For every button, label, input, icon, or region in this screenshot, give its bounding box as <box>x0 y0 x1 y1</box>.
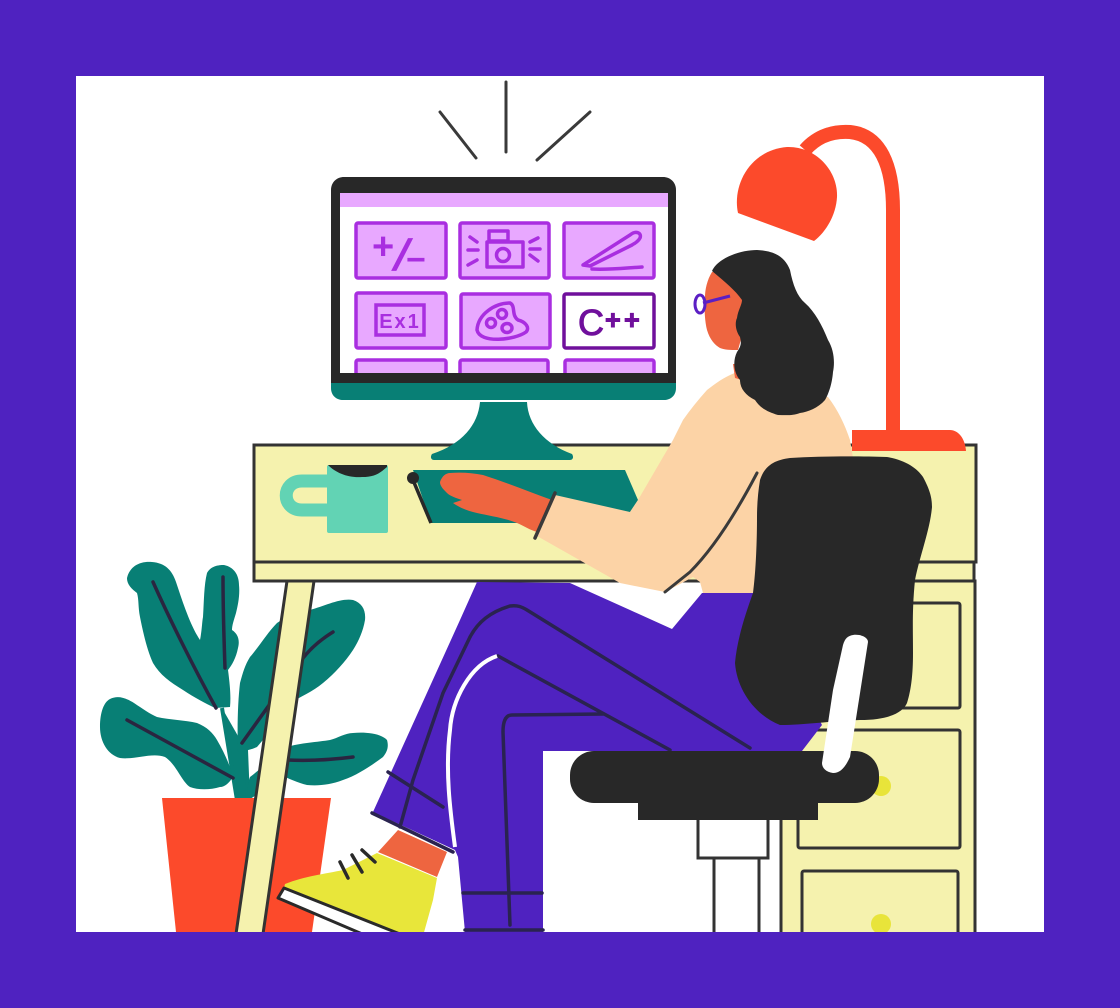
trouser highlight <box>448 656 497 847</box>
monitor stand <box>431 402 573 460</box>
monitor chin <box>331 383 676 400</box>
desk front edge <box>254 562 974 581</box>
light rays <box>440 82 590 160</box>
drawer knobs <box>871 776 891 934</box>
sweater seam <box>665 473 757 592</box>
drawer unit <box>781 581 975 941</box>
app tile: C++: C <box>578 302 604 343</box>
chair post <box>698 818 768 938</box>
chair armrest <box>822 635 868 773</box>
icon: potted plant <box>100 562 388 932</box>
tablet pen knob <box>407 472 419 484</box>
sweater <box>537 372 860 593</box>
drawer three <box>802 871 958 941</box>
mug body <box>327 465 388 533</box>
desktop computer <box>331 82 676 460</box>
face <box>705 272 752 350</box>
app tile: plus minus: − <box>406 241 426 279</box>
hair <box>712 250 834 415</box>
app tile: spreadsheet: Ex1 <box>379 311 421 333</box>
app tile: pencil <box>564 223 654 278</box>
scene <box>100 82 976 941</box>
partial tiles row <box>354 358 656 373</box>
lamp shade <box>737 147 837 241</box>
app tile: C++: + <box>605 305 621 335</box>
plant stems <box>222 708 248 800</box>
chair seat base <box>638 790 818 820</box>
mug handle <box>286 481 327 510</box>
app tile: plus minus: / <box>388 230 417 280</box>
plant pot <box>162 798 331 932</box>
head <box>695 250 834 415</box>
app tile: camera <box>460 223 549 278</box>
lamp base <box>852 430 966 451</box>
tablet edge <box>413 480 431 523</box>
monitor bezel <box>331 177 676 383</box>
sleeve cuff <box>535 493 555 538</box>
white canvas panel <box>76 76 1044 932</box>
neck <box>733 364 742 380</box>
trouser seams <box>372 606 750 930</box>
icon: desk lamp <box>737 132 966 451</box>
icon: mug <box>286 465 388 533</box>
drawer two <box>798 730 960 848</box>
app tile: palette <box>461 294 550 348</box>
person <box>278 250 932 938</box>
hand <box>440 473 552 532</box>
screen title bar <box>340 193 668 207</box>
graphics tablet <box>407 470 638 523</box>
lamp arm <box>805 132 893 436</box>
trousers <box>373 582 822 932</box>
shoe <box>278 850 437 936</box>
chair seat <box>570 751 879 803</box>
plant leaves <box>100 562 388 800</box>
app tile: C++ <box>564 294 654 348</box>
desk <box>236 445 976 941</box>
desk chair <box>570 456 932 938</box>
desk leg <box>236 581 314 934</box>
app tile: plus minus: + <box>372 226 394 268</box>
app tile: C++: + <box>624 305 640 335</box>
chair back <box>735 456 932 725</box>
desk top <box>254 445 976 562</box>
app tile: spreadsheet <box>356 293 446 348</box>
mug coffee <box>328 465 387 477</box>
app tile: plus minus <box>356 223 446 280</box>
drawer one <box>902 602 962 710</box>
monitor screen <box>340 193 668 373</box>
illustration <box>76 76 1044 932</box>
glasses <box>695 295 730 313</box>
ankle <box>378 830 447 877</box>
plant leaf veins <box>127 577 353 778</box>
